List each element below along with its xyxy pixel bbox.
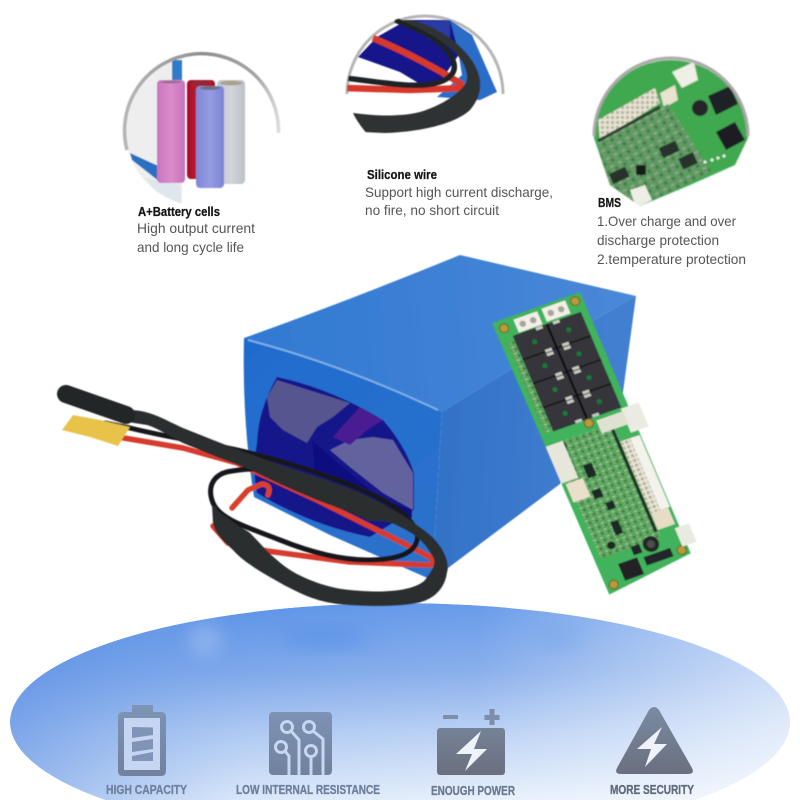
description [137, 220, 255, 255]
description: and long cycle life [137, 239, 244, 255]
panel: A+ battery cells [120, 50, 279, 255]
connector plug [66, 394, 126, 415]
long white connector [621, 435, 670, 513]
upper side connectors [595, 402, 649, 442]
description: Support high current discharge, [365, 184, 553, 200]
heading: BMS [598, 196, 621, 210]
icon: battery [118, 705, 166, 776]
battery left face [244, 338, 442, 580]
description [597, 213, 746, 267]
right side connector [675, 523, 697, 547]
panel: BMS board [492, 288, 706, 595]
yellow tape [62, 415, 130, 446]
dark chip row [611, 428, 657, 532]
heading: A+Battery cells [138, 205, 220, 219]
feature: low internal resistance [236, 712, 380, 797]
side components strip [507, 340, 553, 433]
feature: high capacity [106, 705, 188, 797]
red cell [187, 80, 215, 179]
top power terminals [513, 300, 571, 333]
battery right face [432, 296, 636, 580]
icon: circuit traces [269, 712, 332, 775]
panel: battery pack with wires [62, 255, 636, 606]
description: no fire, no short circuit [365, 202, 499, 218]
icon: car battery with bolt [437, 709, 505, 775]
control chips [555, 433, 631, 553]
description: 1.Over charge and over [597, 213, 736, 229]
battery top face [244, 255, 636, 412]
inductor and regulator [612, 531, 676, 581]
beige connector [651, 507, 675, 530]
label: MORE SECURITY [610, 783, 695, 797]
label: ENOUGH POWER [431, 784, 515, 798]
battery window with reflections [254, 377, 414, 537]
pink cell [157, 80, 185, 183]
battery edge highlights [248, 340, 438, 410]
grey cell [217, 80, 245, 184]
brass screws [497, 295, 692, 591]
circular photo: cells [120, 50, 279, 205]
blue ellipse base [10, 603, 790, 800]
red loop at pack [232, 484, 269, 508]
description: 2.temperature protection [597, 251, 746, 267]
board [492, 292, 695, 595]
circular photo: wire [345, 16, 503, 133]
heading: Silicone wire [367, 168, 437, 182]
feature: enough power [431, 709, 515, 798]
feature: more security [610, 707, 695, 797]
description: discharge protection [597, 232, 719, 248]
icon: warning triangle with bolt [616, 707, 693, 774]
MOSFET array [513, 312, 621, 431]
circular photo: BMS board [590, 55, 755, 210]
black sheathed cable [128, 410, 448, 606]
left side connectors [546, 440, 591, 504]
red wire [112, 436, 434, 565]
label: LOW INTERNAL RESISTANCE [236, 783, 380, 797]
panel: silicone wire [345, 16, 553, 218]
panel: BMS [590, 55, 755, 267]
component field [552, 423, 662, 560]
description: High output current [137, 220, 255, 236]
thin black wire loop [105, 423, 417, 560]
label: HIGH CAPACITY [106, 783, 188, 797]
description [365, 184, 553, 218]
purple cell [196, 86, 224, 188]
